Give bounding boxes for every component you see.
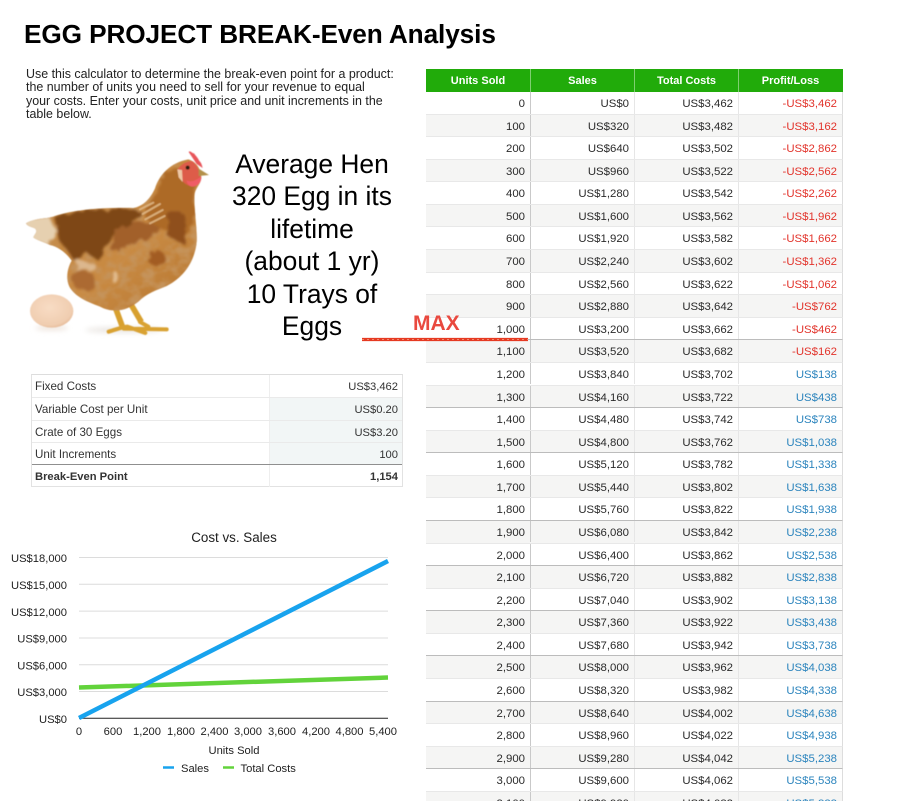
data table: units sold, sales, costs, profit/loss: 1,800: [496, 504, 525, 516]
x axis labels: 600: [104, 726, 122, 738]
data table: units sold, sales, costs, profit/loss: US$8,960: [578, 730, 629, 742]
data table: units sold, sales, costs, profit/loss: US$3,962: [682, 662, 733, 674]
break-even settings table: US$0.20: [354, 404, 398, 416]
table header: Units Sold: [451, 75, 505, 87]
data table: units sold, sales, costs, profit/loss: US$7,040: [578, 595, 629, 607]
data table: units sold, sales, costs, profit/loss: US$8,320: [578, 685, 629, 697]
y axis labels: US$15,000: [11, 580, 67, 592]
data table: units sold, sales, costs, profit/loss: US$3,438: [786, 617, 837, 629]
y axis labels: US$18,000: [11, 553, 67, 565]
x axis labels: 1,800: [167, 726, 195, 738]
illustration: hen and egg: [26, 150, 210, 336]
data table: units sold, sales, costs, profit/loss: US$5,440: [578, 482, 629, 494]
data table: units sold, sales, costs, profit/loss: US$3,582: [682, 233, 733, 245]
data table: units sold, sales, costs, profit/loss: US$0: [600, 98, 629, 110]
data table: units sold, sales, costs, profit/loss: -US$762: [792, 301, 837, 313]
data table: units sold, sales, costs, profit/loss: US$9,280: [578, 753, 629, 765]
intro text: Use this calculator to determine the break-even point for a product:: [26, 66, 394, 80]
data table: units sold, sales, costs, profit/loss: US$3,762: [682, 437, 733, 449]
data table: units sold, sales, costs, profit/loss: US$960: [588, 166, 629, 178]
data table: units sold, sales, costs, profit/loss: US$3,562: [682, 211, 733, 223]
callout: average hen egg output: 10 Trays of: [247, 279, 377, 309]
data table: units sold, sales, costs, profit/loss: US$4,480: [578, 414, 629, 426]
data table: units sold, sales, costs, profit/loss: US$6,720: [578, 572, 629, 584]
data table: units sold, sales, costs, profit/loss: US$640: [588, 143, 629, 155]
table header: Sales: [568, 75, 597, 87]
data table: units sold, sales, costs, profit/loss: US$3,902: [682, 595, 733, 607]
data table: units sold, sales, costs, profit/loss: US$3,542: [682, 188, 733, 200]
data table: units sold, sales, costs, profit/loss: US$3,840: [578, 369, 629, 381]
data table: units sold, sales, costs, profit/loss: US$3,738: [786, 640, 837, 652]
data table: units sold, sales, costs, profit/loss: US$4,002: [682, 708, 733, 720]
data table: units sold, sales, costs, profit/loss: US$5,238: [786, 753, 837, 765]
data table: units sold, sales, costs, profit/loss: US$5,760: [578, 504, 629, 516]
data table: units sold, sales, costs, profit/loss: US$3,842: [682, 527, 733, 539]
data table: units sold, sales, costs, profit/loss: 2,100: [496, 572, 525, 584]
data table: units sold, sales, costs, profit/loss: US$3,862: [682, 550, 733, 562]
data table: units sold, sales, costs, profit/loss: 2,600: [496, 685, 525, 697]
legend: Sales: [181, 763, 209, 775]
data table: units sold, sales, costs, profit/loss: US$7,680: [578, 640, 629, 652]
data table: units sold, sales, costs, profit/loss: US$1,920: [578, 233, 629, 245]
data table: units sold, sales, costs, profit/loss: 1,900: [496, 527, 525, 539]
data table: units sold, sales, costs, profit/loss: -US$3,162: [783, 121, 837, 133]
table header: Profit/Loss: [762, 75, 819, 87]
data table: units sold, sales, costs, profit/loss: 2,000: [496, 550, 525, 562]
data table: units sold, sales, costs, profit/loss: US$2,838: [786, 572, 837, 584]
data table: units sold, sales, costs, profit/loss: 500: [506, 211, 525, 223]
data table: units sold, sales, costs, profit/loss: US$3,462: [682, 98, 733, 110]
data table: units sold, sales, costs, profit/loss: 400: [506, 188, 525, 200]
data table: units sold, sales, costs, profit/loss: US$2,538: [786, 550, 837, 562]
data table: units sold, sales, costs, profit/loss: 1,600: [496, 459, 525, 471]
data table: units sold, sales, costs, profit/loss: US$3,802: [682, 482, 733, 494]
data table: units sold, sales, costs, profit/loss: 700: [506, 256, 525, 268]
annotation: MAX label: MAX: [413, 312, 460, 335]
data table: units sold, sales, costs, profit/loss: US$8,640: [578, 708, 629, 720]
data table: units sold, sales, costs, profit/loss: US$4,062: [682, 775, 733, 787]
data table: units sold, sales, costs, profit/loss: -US$2,862: [783, 143, 837, 155]
callout: average hen egg output: (about 1 yr): [245, 246, 379, 276]
data table: units sold, sales, costs, profit/loss: 2,200: [496, 595, 525, 607]
x axis labels: 2,400: [200, 726, 228, 738]
data table: units sold, sales, costs, profit/loss: 1,200: [496, 369, 525, 381]
data table: units sold, sales, costs, profit/loss: US$3,662: [682, 324, 733, 336]
data table: units sold, sales, costs, profit/loss: US$3,782: [682, 459, 733, 471]
data table: units sold, sales, costs, profit/loss: US$1,038: [786, 437, 837, 449]
data table: units sold, sales, costs, profit/loss: US$320: [588, 121, 629, 133]
annotation: red underline: [362, 338, 528, 342]
data table: units sold, sales, costs, profit/loss: US$438: [796, 392, 837, 404]
data table: units sold, sales, costs, profit/loss: US$3,682: [682, 346, 733, 358]
legend: [163, 763, 296, 775]
data table: units sold, sales, costs, profit/loss: US$5,120: [578, 459, 629, 471]
y axis labels: [11, 553, 67, 726]
data table: units sold, sales, costs, profit/loss: US$6,400: [578, 550, 629, 562]
data table: units sold, sales, costs, profit/loss: US$6,080: [578, 527, 629, 539]
data table: units sold, sales, costs, profit/loss: US$3,942: [682, 640, 733, 652]
sales line: [79, 561, 388, 718]
callout: average hen egg output: [232, 149, 392, 341]
callout: average hen egg output: lifetime: [270, 214, 354, 244]
data table: units sold, sales, costs, profit/loss: 2,800: [496, 730, 525, 742]
break-even settings table: US$3,462: [348, 381, 398, 393]
x axis labels: 4,800: [336, 726, 364, 738]
data table: units sold, sales, costs, profit/loss: US$3,822: [682, 504, 733, 516]
data table: units sold, sales, costs, profit/loss: US$3,622: [682, 279, 733, 291]
data table: units sold, sales, costs, profit/loss: 200: [506, 143, 525, 155]
data table: units sold, sales, costs, profit/loss: US$3,922: [682, 617, 733, 629]
intro text: your costs. Enter your costs, unit price and unit increments in the: [26, 94, 383, 108]
data table: units sold, sales, costs, profit/loss: 2,400: [496, 640, 525, 652]
x axis labels: 3,000: [234, 726, 262, 738]
data table: units sold, sales, costs, profit/loss: US$2,240: [578, 256, 629, 268]
data table: units sold, sales, costs, profit/loss: 2,900: [496, 753, 525, 765]
data table: units sold, sales, costs, profit/loss: -US$3,462: [783, 98, 837, 110]
x axis labels: 3,600: [268, 726, 296, 738]
data table: units sold, sales, costs, profit/loss: US$3,702: [682, 369, 733, 381]
data table: units sold, sales, costs, profit/loss: -US$1,062: [783, 279, 837, 291]
legend: Total Costs: [240, 763, 296, 775]
break-even settings table: [31, 374, 403, 487]
data table: units sold, sales, costs, profit/loss: US$3,742: [682, 414, 733, 426]
data table: units sold, sales, costs, profit/loss: US$1,600: [578, 211, 629, 223]
break-even settings table: Fixed Costs: [35, 380, 96, 393]
data table: units sold, sales, costs, profit/loss: US$2,560: [578, 279, 629, 291]
data table: units sold, sales, costs, profit/loss: US$3,482: [682, 121, 733, 133]
data table: units sold, sales, costs, profit/loss: US$4,638: [786, 708, 837, 720]
data table: units sold, sales, costs, profit/loss: -US$162: [792, 346, 837, 358]
data table: units sold, sales, costs, profit/loss: US$3,882: [682, 572, 733, 584]
data table: units sold, sales, costs, profit/loss: US$3,200: [578, 324, 629, 336]
break-even settings table: Crate of 30 Eggs: [35, 426, 122, 438]
x axis labels: 5,400: [369, 726, 397, 738]
x axis title: Units Sold: [208, 745, 260, 757]
data table: units sold, sales, costs, profit/loss: 2,700: [496, 708, 525, 720]
data table: units sold, sales, costs, profit/loss: -US$1,362: [783, 256, 837, 268]
data table: units sold, sales, costs, profit/loss: -US$1,662: [783, 233, 837, 245]
callout: average hen egg output: Eggs: [282, 311, 342, 341]
data table: units sold, sales, costs, profit/loss: 1,300: [496, 392, 525, 404]
y axis labels: US$12,000: [11, 607, 67, 619]
data table: units sold, sales, costs, profit/loss: US$4,042: [682, 753, 733, 765]
data table: units sold, sales, costs, profit/loss: US$1,280: [578, 188, 629, 200]
data table: units sold, sales, costs, profit/loss: 1,400: [496, 414, 525, 426]
data table: units sold, sales, costs, profit/loss: -US$462: [792, 324, 837, 336]
data table: units sold, sales, costs, profit/loss: 2,300: [496, 617, 525, 629]
data table: units sold, sales, costs, profit/loss: [426, 69, 843, 801]
data table: units sold, sales, costs, profit/loss: US$4,038: [786, 662, 837, 674]
total costs line: [79, 678, 388, 688]
data table: units sold, sales, costs, profit/loss: 100: [506, 121, 525, 133]
data table: units sold, sales, costs, profit/loss: US$3,602: [682, 256, 733, 268]
data table: units sold, sales, costs, profit/loss: 2,500: [496, 662, 525, 674]
data table: units sold, sales, costs, profit/loss: 1,500: [496, 437, 525, 449]
data table: units sold, sales, costs, profit/loss: -US$2,562: [783, 166, 837, 178]
y axis labels: US$3,000: [17, 687, 67, 699]
callout: average hen egg output: Average Hen: [235, 149, 389, 179]
data table: units sold, sales, costs, profit/loss: US$4,160: [578, 392, 629, 404]
data table: units sold, sales, costs, profit/loss: 1,700: [496, 482, 525, 494]
data table: units sold, sales, costs, profit/loss: -US$2,262: [783, 188, 837, 200]
intro text: [26, 66, 394, 121]
data table: units sold, sales, costs, profit/loss: -US$1,962: [783, 211, 837, 223]
x axis labels: [76, 726, 397, 738]
x axis labels: 0: [76, 726, 82, 738]
intro text: the number of units you need to sell for your revenue to equal: [26, 80, 365, 94]
data table: units sold, sales, costs, profit/loss: US$738: [796, 414, 837, 426]
line chart: cost vs sales: [11, 530, 397, 775]
break-even settings table: US$3.20: [354, 426, 398, 438]
data table: units sold, sales, costs, profit/loss: US$4,338: [786, 685, 837, 697]
data table: units sold, sales, costs, profit/loss: 0: [519, 98, 525, 110]
data table: units sold, sales, costs, profit/loss: US$3,138: [786, 595, 837, 607]
break-even settings table: 100: [379, 448, 398, 460]
data table: units sold, sales, costs, profit/loss: 300: [506, 166, 525, 178]
break-even settings table: Variable Cost per Unit: [35, 403, 148, 416]
data table: units sold, sales, costs, profit/loss: US$3,522: [682, 166, 733, 178]
data table: units sold, sales, costs, profit/loss: US$4,800: [578, 437, 629, 449]
data table: units sold, sales, costs, profit/loss: 3,000: [496, 775, 525, 787]
data table: units sold, sales, costs, profit/loss: 800: [506, 279, 525, 291]
break-even settings table: 1,154: [370, 471, 398, 483]
data table: units sold, sales, costs, profit/loss: 1,000: [496, 324, 525, 336]
data table: units sold, sales, costs, profit/loss: 600: [506, 233, 525, 245]
data table: units sold, sales, costs, profit/loss: US$2,238: [786, 527, 837, 539]
table header: [426, 69, 843, 92]
data table: units sold, sales, costs, profit/loss: US$1,938: [786, 504, 837, 516]
y axis labels: US$9,000: [17, 634, 67, 646]
data table: units sold, sales, costs, profit/loss: US$3,642: [682, 301, 733, 313]
table header: Total Costs: [657, 75, 716, 87]
data table: units sold, sales, costs, profit/loss: US$8,000: [578, 662, 629, 674]
data table: units sold, sales, costs, profit/loss: US$3,982: [682, 685, 733, 697]
data table: units sold, sales, costs, profit/loss: US$3,722: [682, 392, 733, 404]
data table: units sold, sales, costs, profit/loss: US$5,538: [786, 775, 837, 787]
data table: units sold, sales, costs, profit/loss: 1,100: [496, 346, 525, 358]
data table: units sold, sales, costs, profit/loss: US$7,360: [578, 617, 629, 629]
y axis labels: US$0: [39, 714, 67, 726]
x axis labels: 1,200: [133, 726, 161, 738]
data table: units sold, sales, costs, profit/loss: US$9,600: [578, 775, 629, 787]
data table: units sold, sales, costs, profit/loss: US$3,520: [578, 346, 629, 358]
data table: units sold, sales, costs, profit/loss: US$2,880: [578, 301, 629, 313]
chart title: Cost vs. Sales: [191, 530, 277, 545]
data table: units sold, sales, costs, profit/loss: US$1,638: [786, 482, 837, 494]
data table: units sold, sales, costs, profit/loss: US$1,338: [786, 459, 837, 471]
callout: average hen egg output: 320 Egg in its: [232, 181, 392, 211]
data table: units sold, sales, costs, profit/loss: US$138: [796, 369, 837, 381]
x axis labels: 4,200: [302, 726, 330, 738]
data table: units sold, sales, costs, profit/loss: US$4,938: [786, 730, 837, 742]
title: EGG PROJECT BREAK-Even Analysis: [24, 19, 496, 49]
data table: units sold, sales, costs, profit/loss: US$4,022: [682, 730, 733, 742]
data table: units sold, sales, costs, profit/loss: 900: [506, 301, 525, 313]
data table: units sold, sales, costs, profit/loss: US$3,502: [682, 143, 733, 155]
y axis labels: US$6,000: [17, 660, 67, 672]
break-even settings table: Unit Increments: [35, 448, 116, 460]
intro text: table below.: [26, 107, 92, 121]
break-even settings table: Break-Even Point: [35, 471, 128, 483]
